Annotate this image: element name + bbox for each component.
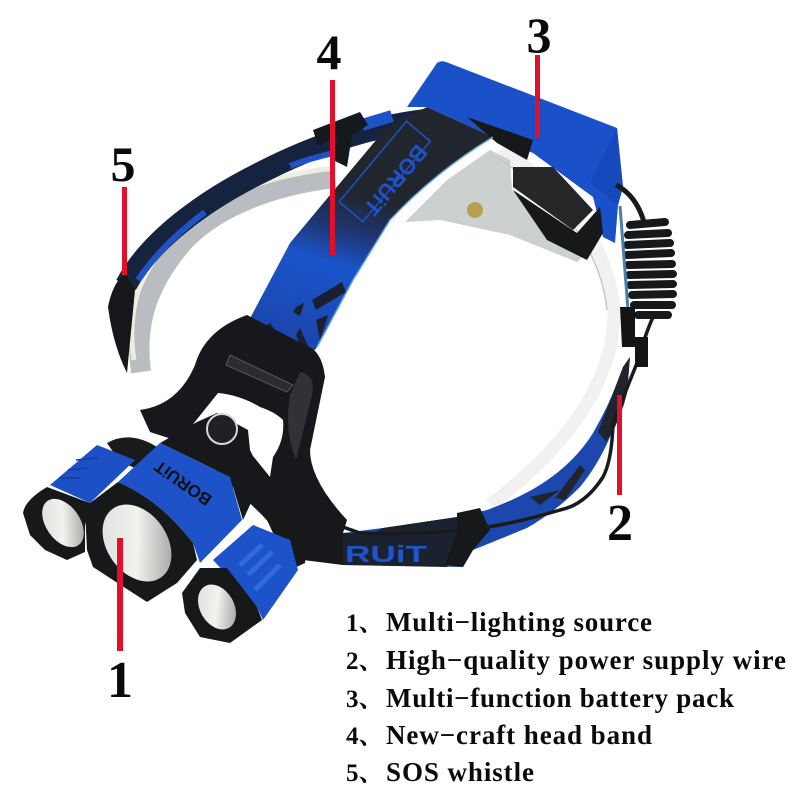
band logo xyxy=(339,121,439,229)
item 5: SOS whistle xyxy=(386,757,534,787)
callout 1 xyxy=(107,538,133,709)
item 3: Multi−function battery pack xyxy=(386,683,734,713)
callout 2: 2 xyxy=(607,495,633,552)
item 1: 1、 xyxy=(346,610,384,637)
main lamp xyxy=(85,413,263,602)
battery clip and pad xyxy=(467,117,603,260)
callout 5 xyxy=(110,136,136,275)
callout 4 xyxy=(316,24,342,255)
feature list xyxy=(346,607,786,787)
item 3: 3、 xyxy=(346,686,384,713)
strap clip xyxy=(445,508,490,567)
callout 5: 5 xyxy=(110,136,136,192)
bracket xyxy=(140,315,347,565)
battery pack xyxy=(407,61,623,260)
headlamp product xyxy=(23,61,673,643)
clear inner band xyxy=(132,150,614,505)
main lamp: BORUiT xyxy=(151,456,215,509)
callout 3 xyxy=(526,7,552,138)
right lamp xyxy=(182,514,307,643)
item 2: High−quality power supply wire xyxy=(386,645,786,675)
whistle clip xyxy=(108,272,135,373)
item 5: 5、 xyxy=(346,760,384,787)
power supply wire xyxy=(287,185,673,534)
callout 2 xyxy=(607,395,633,552)
callout 1: 1 xyxy=(107,652,133,709)
top head band xyxy=(235,107,493,381)
callout 3: 3 xyxy=(526,7,552,63)
item 2: 2、 xyxy=(346,648,384,675)
strap lettering: RUiT xyxy=(345,541,427,567)
band logo: BORUiT xyxy=(359,140,432,221)
rear head strap xyxy=(126,112,425,285)
item 4: 4、 xyxy=(346,723,384,750)
item 1: Multi−lighting source xyxy=(386,607,652,637)
left lamp xyxy=(23,437,157,560)
item 4: New−craft head band xyxy=(386,720,652,750)
callout 4: 4 xyxy=(316,24,342,80)
lower head strap xyxy=(343,357,630,567)
